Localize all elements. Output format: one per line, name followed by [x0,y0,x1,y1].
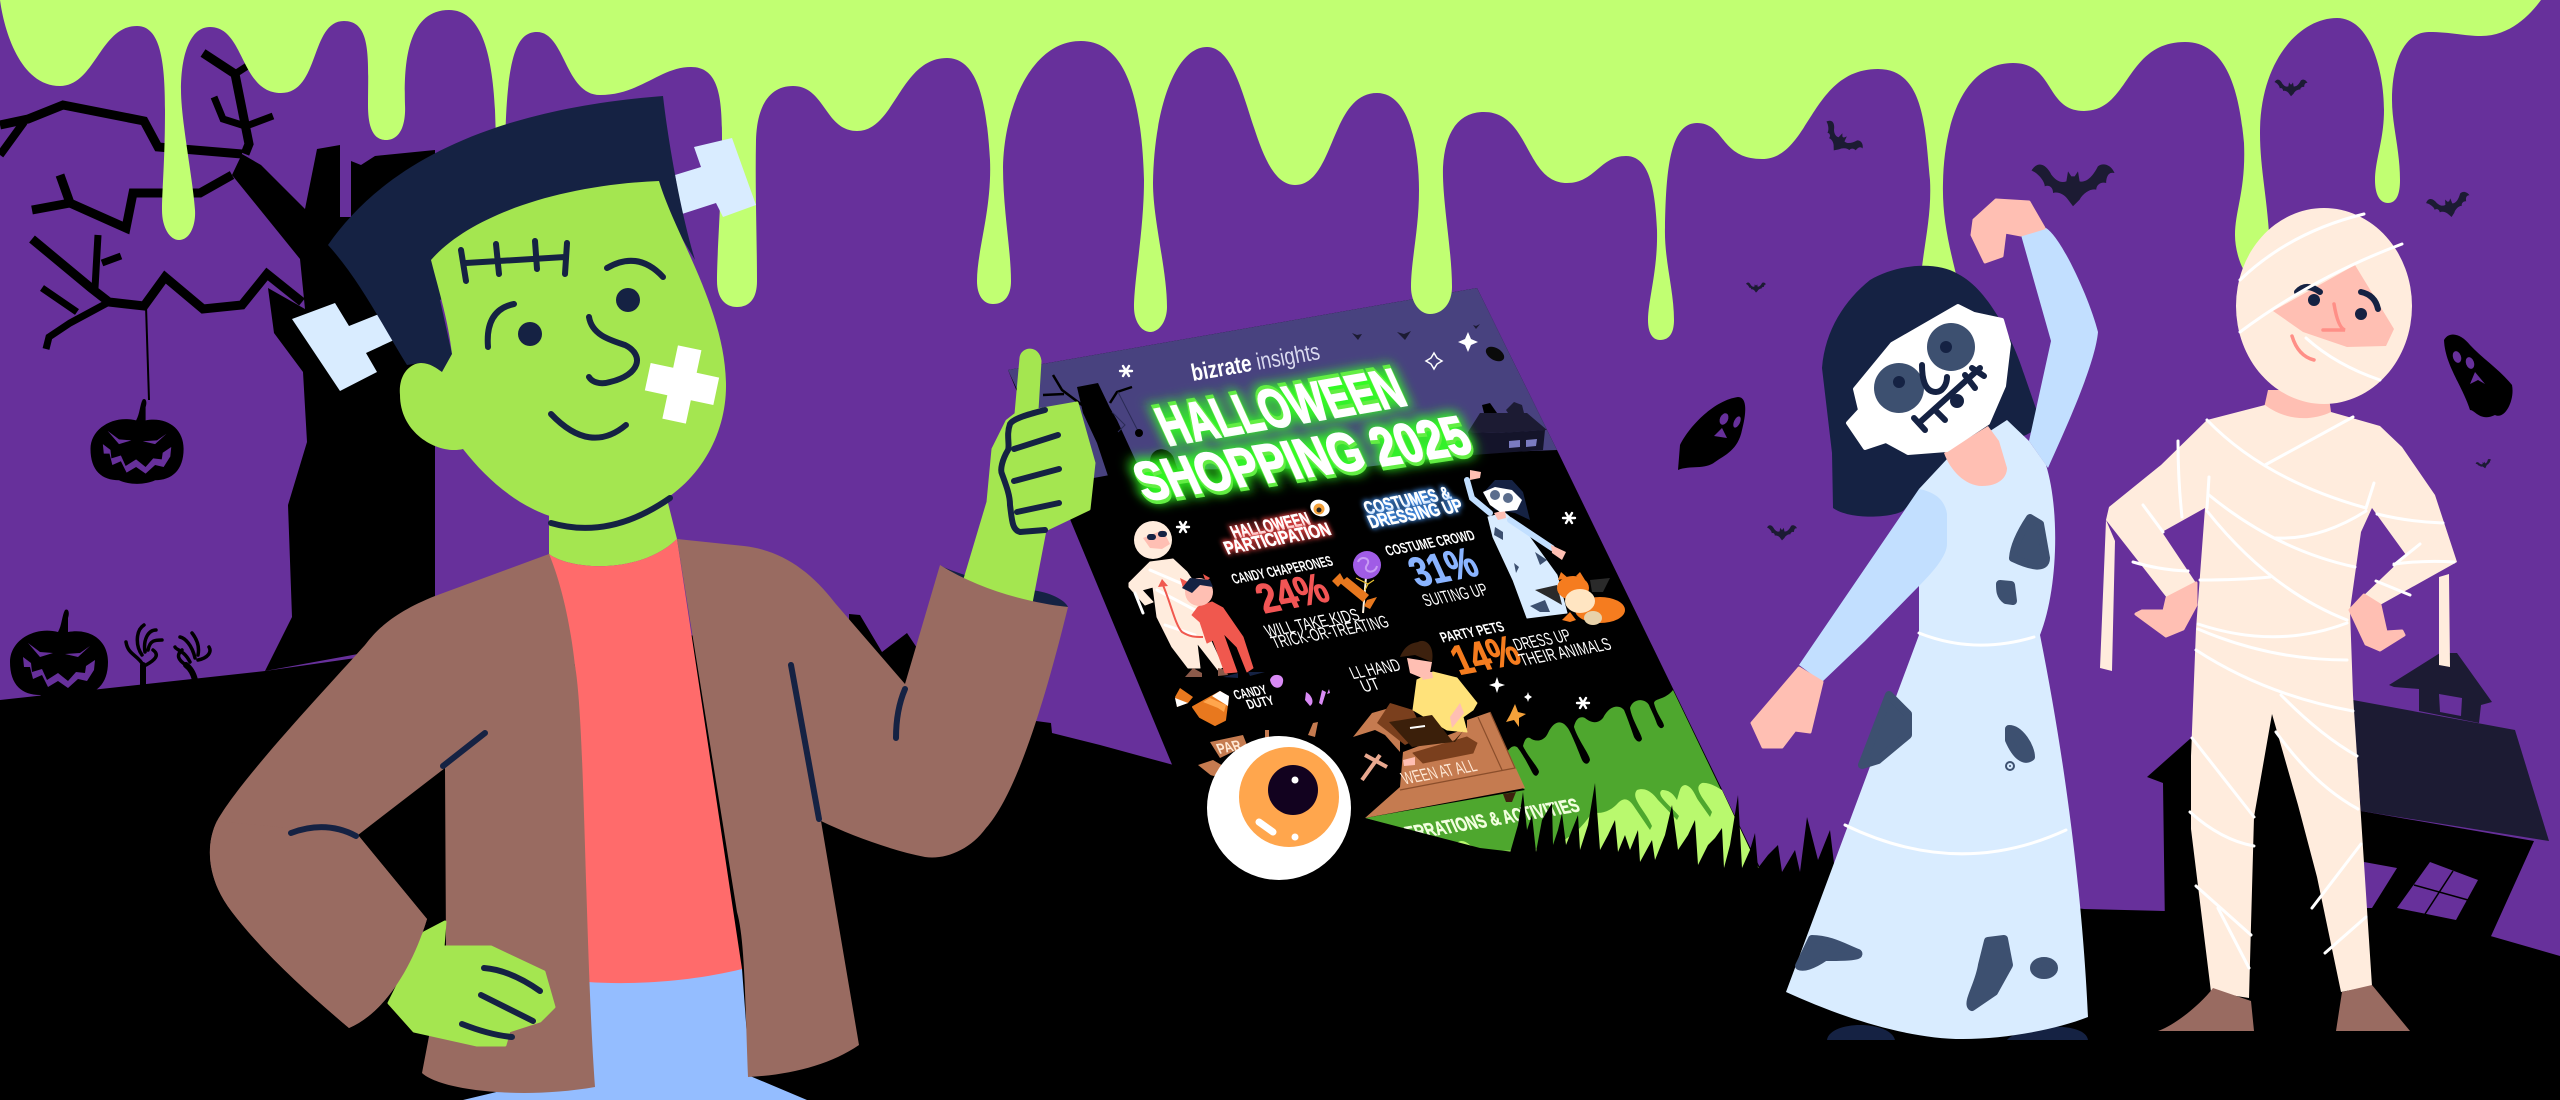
poster stat texts: UT [1357,674,1383,696]
house dormer [2389,653,2492,723]
neck [549,495,677,566]
smile [551,414,626,438]
girl stitched mouth [1914,365,1984,430]
raised arm and thumbs up [965,350,1094,603]
slime drip across the top [0,0,2541,340]
poster dead tree [1043,375,1178,482]
mummy body [2106,405,2457,998]
right jacket panel [677,539,1068,1077]
forehead stitches [461,241,567,281]
poster stat texts: THEIR ANIMALS [1516,634,1614,670]
small grave silhouette behind arm [849,614,925,720]
poster light slime [1460,783,1762,875]
poster heading: participation: PARTICIPATION [1221,520,1334,559]
poster stat texts: CANDY [1230,682,1270,702]
poster title: HALLOWEEN [1147,358,1415,458]
poster stat texts: WEEN AT ALL [1398,756,1480,788]
grass silhouette [1510,783,1836,880]
mummy face [2273,265,2394,347]
girl right sleeve [2021,228,2098,468]
bats [1746,80,2493,540]
mummy neck [2264,390,2331,421]
poster mini zombie girl [1467,470,1567,618]
poster heading: costumes: DRESSING UP [1365,496,1467,533]
lower hand finger lines [462,968,540,1037]
poster heading: participation: HALLOWEEN [1228,509,1314,543]
poster small bats and ghost [1352,324,1507,364]
jacket crease lines [291,665,905,836]
poster lollipop and wrapped candy [1332,551,1381,613]
poster heading: costumes [1361,484,1467,533]
mummy head [2236,208,2412,404]
poster heading: costumes: COSTUMES & [1361,484,1455,519]
red shirt [549,539,742,983]
poster stat texts: PARTY PETS [1437,619,1507,646]
house windows [2364,694,2478,920]
poster heading: costumes: DRESSING UP [1365,496,1467,533]
poster body [1008,288,1766,880]
face bandage cross [640,341,724,428]
poster heading: participation: HALLOWEEN [1228,509,1314,543]
poster sparkles [1120,332,1589,727]
mummy facial features [2292,287,2378,360]
mummy hands [2136,583,2404,650]
house roof [2353,700,2549,841]
poster stat texts: PAR [1214,737,1245,757]
right neck bolt [675,138,756,217]
thumb hand lines [1001,410,1059,532]
sleeve cuff [940,565,1068,607]
mummy shoes [2158,985,2410,1031]
girl dress [1786,420,2088,1039]
poster small eyeball icon [1308,497,1332,519]
girl eyes [1874,323,1975,413]
rolling black hillside [0,620,2560,1100]
poster title [1124,355,1482,515]
ghost left [1678,397,1745,470]
girl feet [1827,1025,2088,1040]
poster title: SHOPPING 2025 [1125,408,1482,515]
hanging pumpkin [90,306,184,484]
poster night sky [1008,288,1557,484]
trousers [463,969,807,1100]
lower hand [389,922,554,1045]
poster stat texts: DRESS UP [1510,626,1574,654]
poster stat texts: WILL TAKE KIDS [1261,605,1363,641]
girl raised hand [1972,200,2044,262]
poster party cat [1535,572,1625,625]
dead tree with branches [0,53,435,671]
girl neck [1944,426,2007,486]
nose [589,317,637,383]
poster title: HALLOWEEN [1146,355,1414,455]
eyes and brows [488,261,663,347]
poster stat texts: 31% [1402,540,1485,596]
left sleeve [210,821,427,1028]
poster mini mummy and devil kid [1129,521,1265,678]
icon: eyeball [1207,736,1351,880]
zombie hands silhouette [126,625,210,685]
poster stat texts: TRICK-OR-TREATING [1268,612,1392,652]
poster stat texts: DUTY [1243,692,1277,712]
character: zombie girl [1752,200,2098,1040]
girl hair [1822,266,2042,517]
poster logo: bizrate insights [1189,338,1322,387]
left neck bolt [292,303,394,391]
poster stat texts: ERRATIONS & ACTIVITIES [1402,795,1583,845]
poster stat texts: CANDY CHAPERONES [1229,553,1336,588]
poster stat texts: SUITING UP [1419,580,1491,610]
poster heading: costumes: COSTUMES & [1361,484,1455,519]
panel: tilted infographic poster [1008,288,1766,880]
mummy wrapping strips [2100,520,2450,671]
poster stat texts: COSTUME CROWD [1383,527,1478,560]
poster heading: participation: PARTICIPATION [1221,520,1334,559]
left jacket panel [210,554,595,1093]
girl left sleeve [1799,489,1947,682]
girl skull face [1848,306,2009,453]
poster green slime footer with drips [1365,690,1762,875]
ghost right [2444,335,2513,417]
poster title: SHOPPING 2025 [1124,405,1481,513]
poster sofa [1198,707,1525,818]
poster light slime lower-left blob [1452,841,1480,852]
poster mini woman with laptop [1377,641,1477,766]
poster haunted house [1468,402,1547,455]
hair [328,96,695,372]
mummy bandage lines [2133,214,2454,968]
girl left hand [1752,668,1822,747]
girl dress stains [1799,518,2054,1007]
poster stat texts: 14% [1444,628,1527,684]
poster title: HALLOWEEN [1146,357,1414,457]
head [400,181,726,523]
haunted house [2147,653,2549,945]
girl dress hem lines [1845,633,2066,854]
poster title: SHOPPING 2025 [1124,405,1481,513]
character: Frankenstein [210,96,1094,1100]
poster stat texts [1214,527,1614,845]
ground pumpkin [10,609,108,699]
character: mummy [2100,208,2457,1031]
poster stat texts: LL HAND [1346,655,1404,683]
jaw line [551,498,670,528]
poster cross [1362,755,1387,780]
poster candy corn [1175,675,1330,725]
poster stat texts: 24% [1249,566,1336,622]
